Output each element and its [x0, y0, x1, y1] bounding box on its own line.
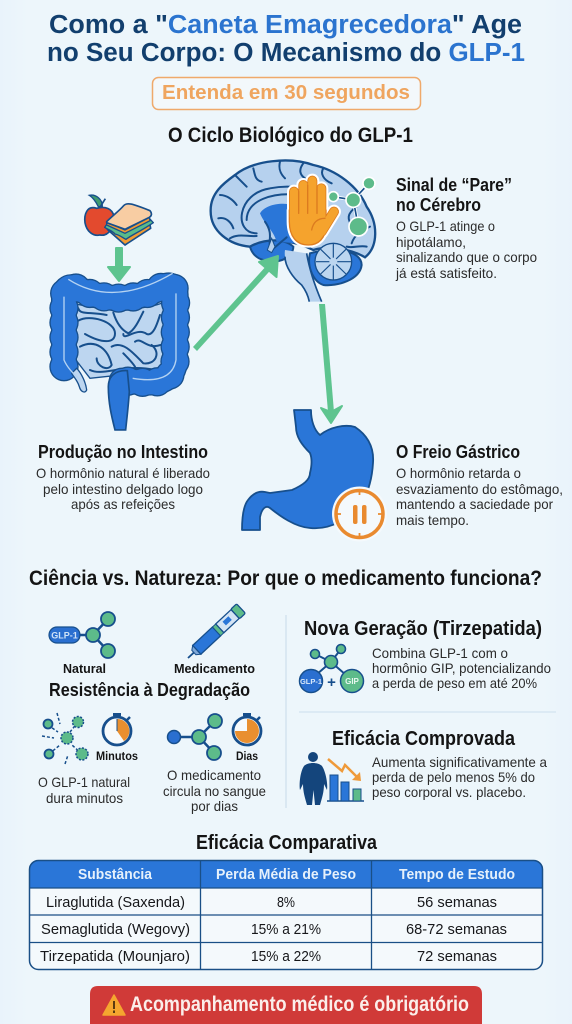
table rows: 8%	[277, 894, 295, 911]
subtitle badge	[152, 78, 420, 110]
table header: Tempo de Estudo	[399, 866, 515, 883]
label: intestine production	[36, 442, 210, 512]
text: stop signal	[395, 175, 537, 281]
text: gastric brake: O hormônio retarda o	[396, 465, 521, 481]
illustration: intestine	[64, 273, 176, 430]
text: medication lasts days: O medicamento	[167, 767, 261, 783]
icon: natural GLP-1 molecule	[49, 612, 115, 658]
text: proven efficacy body	[372, 754, 547, 800]
text: proven efficacy body: Aumenta significativamente a	[372, 754, 547, 770]
colon edge	[64, 285, 176, 383]
warning banner	[90, 986, 482, 1024]
icon: medication molecule	[168, 714, 222, 760]
icon: weight loss chart	[300, 752, 364, 805]
text: natural lasts minutes: O GLP-1 natural	[38, 774, 130, 790]
icon: injection pen	[184, 604, 245, 663]
table header	[78, 866, 515, 883]
arrow: brain to stomach	[319, 304, 342, 423]
label: minutes: Minutos	[96, 751, 138, 763]
label: intestine production: pelo intestino delgado logo	[43, 481, 203, 497]
label: intestine production: Produção no Intestino	[38, 442, 208, 462]
text: gastric brake: mantendo a saciedade por	[396, 496, 553, 512]
title	[47, 11, 525, 67]
comparison table	[29, 860, 543, 970]
table rows: Semaglutida (Wegovy)	[41, 921, 190, 938]
icon: stopwatch minutes	[103, 713, 131, 745]
heading: biological cycle: O Ciclo Biológico do GLP-1	[168, 124, 413, 147]
heading: comparative efficacy: Eficácia Comparativa	[196, 832, 378, 854]
subtitle badge: Entenda em 30 segundos	[162, 82, 410, 104]
title: Como a "Caneta Emagrecedora " Age	[49, 11, 522, 39]
label: intestine production: após as refeições	[71, 496, 175, 512]
heading: proven efficacy: Eficácia Comprovada	[332, 728, 516, 750]
text: gastric brake	[396, 442, 563, 528]
icon: stop hand	[289, 181, 334, 245]
icon: GLP-1 plus GIP: +	[327, 674, 336, 691]
heading: new generation: Nova Geração (Tirzepatida)	[304, 618, 542, 640]
label: medication: Medicamento	[174, 661, 255, 676]
label: natural: Natural	[63, 661, 106, 676]
text: gastric brake: O Freio Gástrico	[396, 442, 520, 462]
text: new generation body	[372, 645, 551, 691]
warning banner: Acompanhamento médico é obrigatório	[130, 993, 469, 1016]
text: stop signal: no Cérebro	[396, 195, 481, 215]
table rows: Liraglutida (Saxenda)	[46, 894, 185, 911]
heading: resistance: Resistência à Degradação	[49, 680, 250, 700]
text: natural lasts minutes: dura minutos	[46, 790, 123, 806]
icon: GLP-1 plus GIP	[300, 644, 364, 692]
text: gastric brake: mais tempo.	[396, 512, 469, 528]
text: medication lasts days: circula no sangue	[163, 783, 266, 799]
arrow: food to intestine	[108, 248, 130, 281]
table rows: 56 semanas	[417, 894, 497, 911]
text: stop signal: O GLP-1 atinge o	[396, 218, 495, 234]
text: natural lasts minutes	[38, 774, 130, 806]
icon: natural GLP-1 molecule: GLP-1	[51, 630, 78, 640]
table rows: Tirzepatida (Mounjaro)	[40, 948, 190, 965]
text: gastric brake: esvaziamento do estômago,	[396, 481, 563, 497]
label: days: Dias	[236, 751, 258, 763]
icon: degraded molecule	[42, 713, 88, 764]
text: stop signal: sinalizando que o corpo	[396, 249, 537, 265]
illustration: stomach	[242, 410, 387, 542]
icon: GLP-1 plus GIP: GLP-1	[300, 677, 322, 686]
title: no Seu Corpo: O Mecanismo do GLP-1	[47, 39, 525, 67]
table rows: 72 semanas	[417, 948, 497, 965]
text: stop signal: Sinal de “Pare”	[396, 175, 512, 195]
table header: Perda Média de Peso	[216, 866, 356, 883]
text: medication lasts days: por dias	[191, 798, 238, 814]
icon: warning triangle	[103, 995, 125, 1015]
icon: pause clock	[332, 486, 387, 542]
text: stop signal: já está satisfeito.	[395, 265, 497, 281]
text: stop signal: hipotálamo,	[396, 234, 466, 250]
text: new generation body: a perda de peso em até 20%	[372, 675, 537, 691]
table header: Substância	[78, 866, 153, 883]
illustration: brain	[211, 161, 375, 302]
text: new generation body: hormônio GIP, potencializando	[372, 660, 551, 676]
text: new generation body: Combina GLP-1 com o	[372, 645, 508, 661]
icon: food	[85, 195, 153, 245]
table rows	[40, 894, 507, 965]
text: medication lasts days	[163, 767, 266, 814]
molecule on brain	[328, 177, 375, 236]
label: intestine production: O hormônio natural é liberado	[36, 465, 210, 481]
text: proven efficacy body: perda de pelo menos 5% do	[372, 769, 535, 785]
text: proven efficacy body: peso corporal vs. placebo.	[372, 784, 526, 800]
arrow: intestine to brain	[193, 256, 278, 351]
table rows: 15% a 21%	[251, 921, 321, 938]
table rows: 15% a 22%	[251, 948, 321, 965]
icon: stopwatch days	[233, 713, 261, 745]
icon: GLP-1 plus GIP: GIP	[345, 677, 360, 686]
table rows: 68-72 semanas	[406, 921, 507, 938]
